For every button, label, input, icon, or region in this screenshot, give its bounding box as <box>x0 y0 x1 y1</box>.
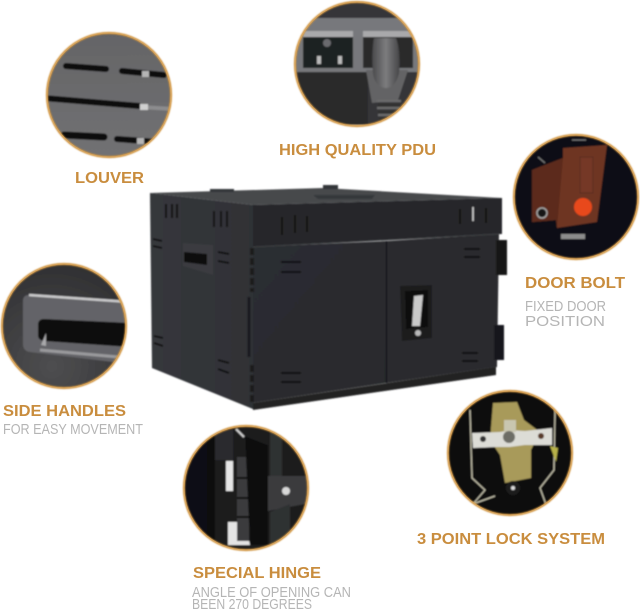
special hinge caption: ANGLE OF OPENING CAN <box>192 584 351 601</box>
louver photo <box>48 34 170 156</box>
door bolt photo <box>514 136 638 258</box>
left door edge <box>248 297 250 357</box>
lock ring <box>448 391 572 515</box>
special hinge label: SPECIAL HINGE <box>193 565 321 582</box>
lock photo <box>448 392 572 514</box>
cabinet front upper band <box>253 198 502 247</box>
pdu ring <box>295 2 419 126</box>
hinge photo <box>184 426 308 550</box>
cabinet top panel <box>150 188 502 205</box>
side handle slot <box>183 243 213 275</box>
panel: louver <box>44 30 174 183</box>
side handle ring <box>2 264 126 388</box>
panel: 3 point lock system <box>417 388 605 548</box>
cabinet base <box>253 367 496 410</box>
pdu label: HIGH QUALITY PDU <box>279 142 436 159</box>
louver label: LOUVER <box>75 170 144 187</box>
louver ring <box>47 33 171 157</box>
panel: door bolt: POSITION <box>525 313 605 330</box>
panel: high quality pdu <box>279 0 436 159</box>
side hinges <box>496 240 507 275</box>
cabinet side panel <box>150 193 253 409</box>
panel: side handles <box>0 262 143 438</box>
hinge ring <box>184 426 308 550</box>
side handle photo <box>2 264 126 388</box>
panel: door bolt <box>510 130 640 330</box>
side handles caption: FOR EASY MOVEMENT <box>3 421 143 438</box>
cabinet vents <box>153 204 486 382</box>
cabinet front doors <box>253 241 386 403</box>
lock label: 3 POINT LOCK SYSTEM <box>417 531 605 548</box>
cabinet <box>150 185 507 410</box>
door bolt label: DOOR BOLT <box>525 275 626 292</box>
door latch <box>400 285 432 341</box>
door bolt ring <box>514 135 638 259</box>
side handles label: SIDE HANDLES <box>3 403 126 420</box>
pdu photo <box>295 0 420 125</box>
panel: special hinge <box>180 425 351 611</box>
door bolt caption: FIXED DOOR <box>525 298 606 315</box>
